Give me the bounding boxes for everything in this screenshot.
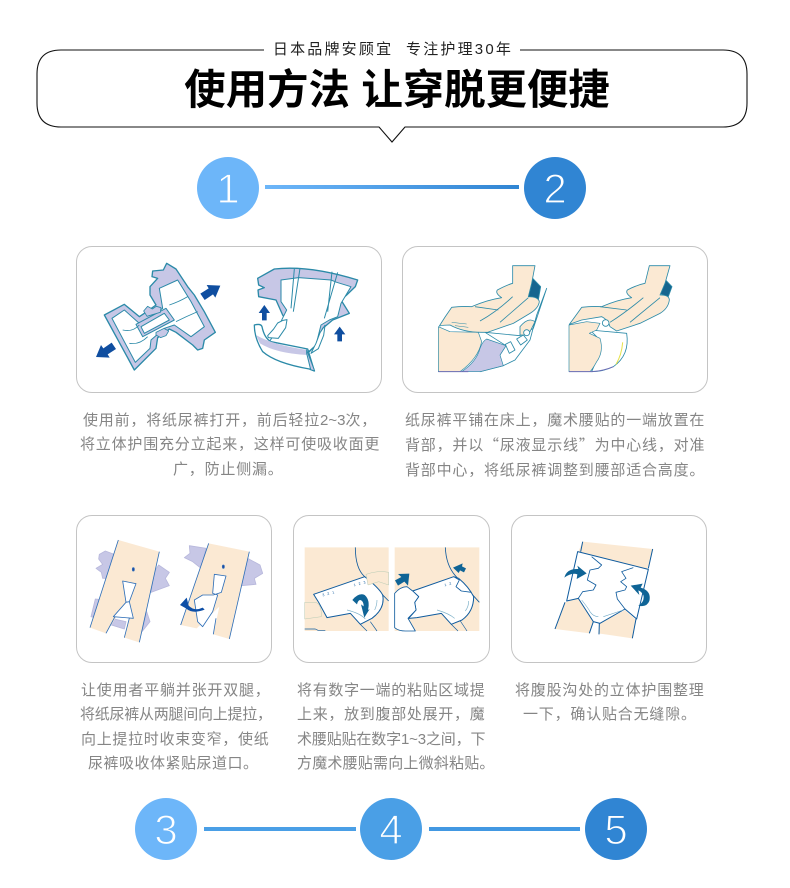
icon: fitted diaper [555,542,653,638]
text: step 4 description: 术腰贴贴在数字1~3之间，下 [297,731,485,748]
icon: placing diaper left [438,266,547,372]
title: 使用方法 让穿脱更便捷 [184,67,610,113]
text: step 5 description [515,682,705,723]
text: step 2 description: 背部中心，将纸尿裤调整到腰部适合高度。 [405,462,705,479]
text: step 2 description [405,412,705,479]
icon: legs with lifted diaper [181,543,263,639]
subtitle: 日本品牌安顾宜 专注护理30年 [273,41,513,58]
text: step 4 description: 方魔术腰贴需向上微斜粘贴。 [297,755,495,772]
icon: curved arrow right [631,584,650,606]
step indicator 1 to 2 [197,157,586,219]
icon: curved arrow left [564,566,587,579]
icon: curved arrow up [352,594,370,618]
icon: curved arrow [180,598,205,612]
text: step 4 description: 上来，放到腹部处展开，魔 [297,706,485,723]
text: step 3 description: 将纸尿裤从两腿间向上提拉， [80,706,272,723]
text: step 3 description [80,682,272,772]
text: step 2 description: 纸尿裤平铺在床上，魔术腰贴的一端放置在 [405,412,705,429]
icon: standing diaper [254,268,358,371]
text: step 4 description: 将有数字一端的粘贴区域提 [297,682,485,699]
step indicator 3 to 5 [135,798,647,860]
icon: diaper attached [395,547,479,631]
panel: step 4 attach front [293,515,490,663]
text: step 5 description: 将腹股沟处的立体护围整理 [515,682,705,699]
panel: step 4 attach front: 1 2 [444,581,453,587]
icon: arrow up right [334,327,345,341]
icon: arrow up-right [200,285,220,300]
text: step 1 description: 将立体护围充分立起来，这样可使吸收面更 [80,436,380,453]
text: step 2 description: 背部，并以“尿液显示线”为中心线，对准 [405,434,705,455]
text: step 3 description: 尿裤吸收体紧贴尿道口。 [88,755,259,772]
step indicator 3 to 5: 5 [604,806,628,853]
header speech bubble [36,50,748,143]
icon: diaper lifted [305,547,389,631]
icon: arrow up left [259,305,270,320]
icon: flat diaper [104,263,215,370]
panel: step 5 adjust leg cuffs [511,515,707,663]
icon: arrow down-left [96,343,116,358]
icon: arrow up-right large [395,574,409,586]
step indicator 3 to 5: 4 [379,806,403,853]
panel: step 4 attach front: 3 2 1 [322,590,336,597]
text: step 1 description: 使用前，将纸尿裤打开，前后轻拉2~3次， [83,412,377,429]
step indicator 1 to 2: 2 [543,165,567,212]
text: step 1 description [80,412,380,478]
panel: step 1 open diaper [76,246,382,393]
text: step 1 description: 广，防止侧漏。 [173,461,284,478]
panel: step 2 place diaper [402,246,708,393]
text: step 4 description [297,682,495,772]
panel: step 4 attach front: 1 2 3 [353,580,367,587]
icon: legs with open diaper [90,540,169,642]
text: step 3 description: 让使用者平躺并张开双腿， [81,682,271,699]
step indicator 1 to 2: 1 [216,165,240,212]
step indicator 3 to 5: 3 [154,806,178,853]
icon: placing diaper right [569,266,672,372]
text: step 3 description: 向上提拉时收束变窄，使纸 [81,731,269,748]
text: step 5 description: 一下，确认贴合无缝隙。 [523,706,697,723]
panel: step 3 lift diaper [76,515,272,663]
icon: arrow up-left small [453,563,466,573]
